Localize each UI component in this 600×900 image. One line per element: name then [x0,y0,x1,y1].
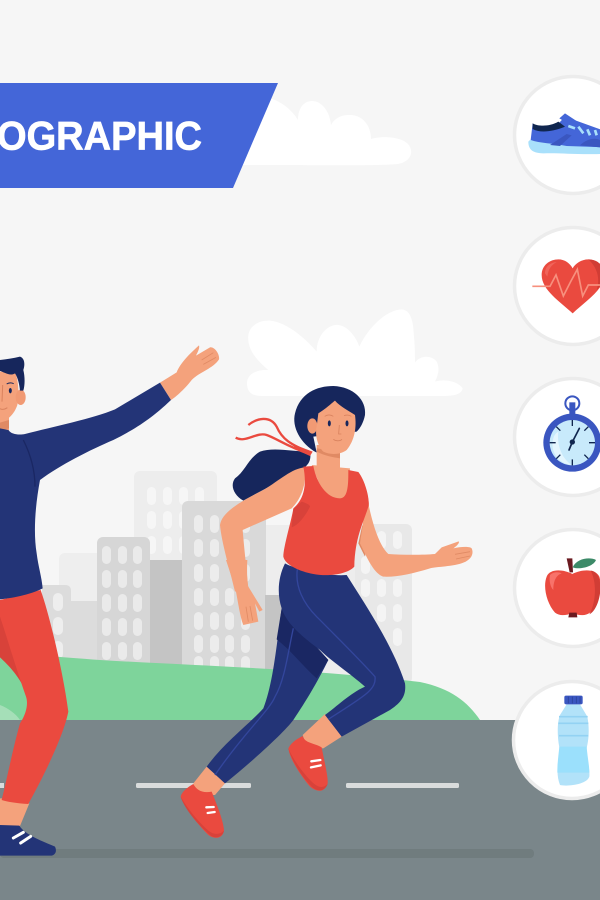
banner [0,83,278,188]
green hill [0,650,480,720]
runner: woman [181,386,473,838]
cloud: top behind banner [240,98,411,165]
icon: stopwatch [514,378,600,496]
woman chest [312,465,350,502]
runner: man [0,345,219,856]
icon: running shoe [514,76,600,194]
cloud: middle [247,309,463,396]
icon: water bottle [514,682,600,798]
man upper body [0,345,219,599]
icon: apple [514,530,600,646]
icon: heart with pulse [514,228,600,344]
man pants [0,590,68,856]
city skyline [42,471,412,684]
banner title: OGRAPHIC [0,114,202,158]
woman legs and shoes [181,560,405,838]
road dashes [0,783,459,788]
road [0,720,600,900]
woman torso, arms and head [220,386,473,592]
